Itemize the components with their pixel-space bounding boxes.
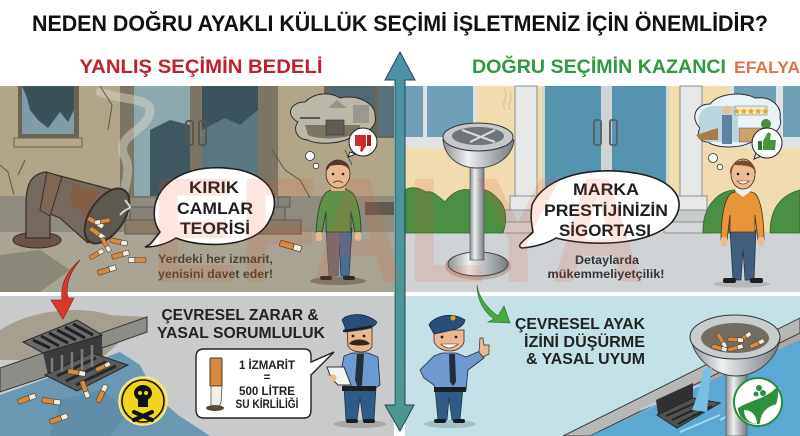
icon: poison warning xyxy=(119,377,167,425)
panel: environmental harm xyxy=(0,296,394,436)
butts in water xyxy=(17,362,111,424)
panel: brand prestige scene xyxy=(405,86,800,292)
speech bubble: broken windows theory: KIRIK xyxy=(189,178,240,197)
icon: cigarette butt xyxy=(206,358,224,411)
icon: eco logo xyxy=(734,378,782,426)
arrow: red curved down xyxy=(51,260,80,319)
heading: lower footprint: İZİNİ DÜŞÜRME xyxy=(524,332,645,351)
polluted water xyxy=(0,352,210,436)
man: worried xyxy=(310,160,366,285)
police officer thumbs up xyxy=(420,315,489,428)
speech bubble: brand insurance: SİGORTASI xyxy=(559,221,651,240)
heading: lower footprint: & YASAL UYUM xyxy=(526,351,645,368)
police officer with notepad xyxy=(327,315,386,428)
door xyxy=(120,86,278,198)
right window xyxy=(324,86,394,215)
speech bubble: broken windows theory xyxy=(145,168,274,247)
windows xyxy=(405,86,800,148)
callout: 1 butt equals 500 litres: 1 İZMARİT xyxy=(239,359,295,372)
watermark: EFALYA xyxy=(150,146,645,314)
brand label: EFALYA xyxy=(734,58,800,77)
speech bubble: broken windows theory: CAMLAR xyxy=(177,199,253,218)
heading: lower footprint xyxy=(515,316,645,368)
cigarette butts pile xyxy=(87,200,302,275)
clean water and curb xyxy=(563,318,800,436)
thought cloud: satisfied office: ★★★★★ xyxy=(733,107,770,116)
callout: 1 butt equals 500 litres: 500 LİTRE xyxy=(239,385,295,398)
heading: gain of right choice: DOĞRU SEÇİMİN KAZANCI xyxy=(472,56,726,78)
bushes xyxy=(405,188,800,233)
callout: 1 butt equals 500 litres xyxy=(196,349,334,418)
metal ashtray with water xyxy=(690,315,780,436)
arrow: green curved xyxy=(477,285,510,323)
entrance door xyxy=(542,86,669,196)
thought cloud: satisfied office xyxy=(695,94,781,170)
speech bubble: brand insurance: PRESTİJİNİZİN xyxy=(544,201,668,220)
columns xyxy=(499,86,712,233)
thought cloud: dirty kitchen xyxy=(291,94,375,169)
heading: cost of wrong choice: YANLIŞ SEÇİMİN BEDELİ xyxy=(80,57,322,78)
caption: broken windows xyxy=(158,252,273,281)
heading: environmental and legal: ÇEVRESEL ZARAR & xyxy=(162,307,319,324)
panel: reduced footprint xyxy=(405,296,800,436)
rusty fallen pipe xyxy=(13,172,138,251)
icon: thumbs up xyxy=(752,128,782,159)
speech bubble: broken windows theory: TEORİSİ xyxy=(180,219,250,238)
stainless ashtray stand xyxy=(443,88,514,280)
caption: broken windows: Yerdeki her izmarit, xyxy=(158,252,273,266)
smoke xyxy=(100,92,150,212)
panel: broken windows scene xyxy=(0,86,394,292)
man: happy xyxy=(714,159,770,288)
wall cracks xyxy=(0,86,352,198)
callout: 1 butt equals 500 litres: SU KİRLİLİĞİ xyxy=(236,398,298,411)
speech bubble: brand insurance: MARKA xyxy=(573,180,639,199)
caption: attention to detail xyxy=(548,253,664,281)
heading: environmental and legal: YASAL SORUMLULUK xyxy=(157,325,325,342)
steps xyxy=(125,197,301,234)
broken window xyxy=(14,86,82,147)
heading: environmental and legal xyxy=(157,307,325,342)
heading: lower footprint: ÇEVRESEL AYAK xyxy=(515,316,645,333)
speech bubble: brand insurance xyxy=(520,171,679,248)
curb and storm drain xyxy=(0,317,147,392)
caption: broken windows: yenisini davet eder! xyxy=(158,267,273,281)
icon: thumbs down xyxy=(348,128,377,157)
title: NEDEN DOĞRU AYAKLI KÜLLÜK SEÇİMİ İŞLETMENİZ İÇİN ÖNEMLİDİR? xyxy=(32,11,768,36)
callout: 1 butt equals 500 litres: = xyxy=(264,372,271,384)
caption: attention to detail: Detaylarda xyxy=(575,253,639,267)
arrow: central double-headed xyxy=(385,52,415,431)
caption: attention to detail: mükemmeliyetçilik! xyxy=(548,267,664,281)
